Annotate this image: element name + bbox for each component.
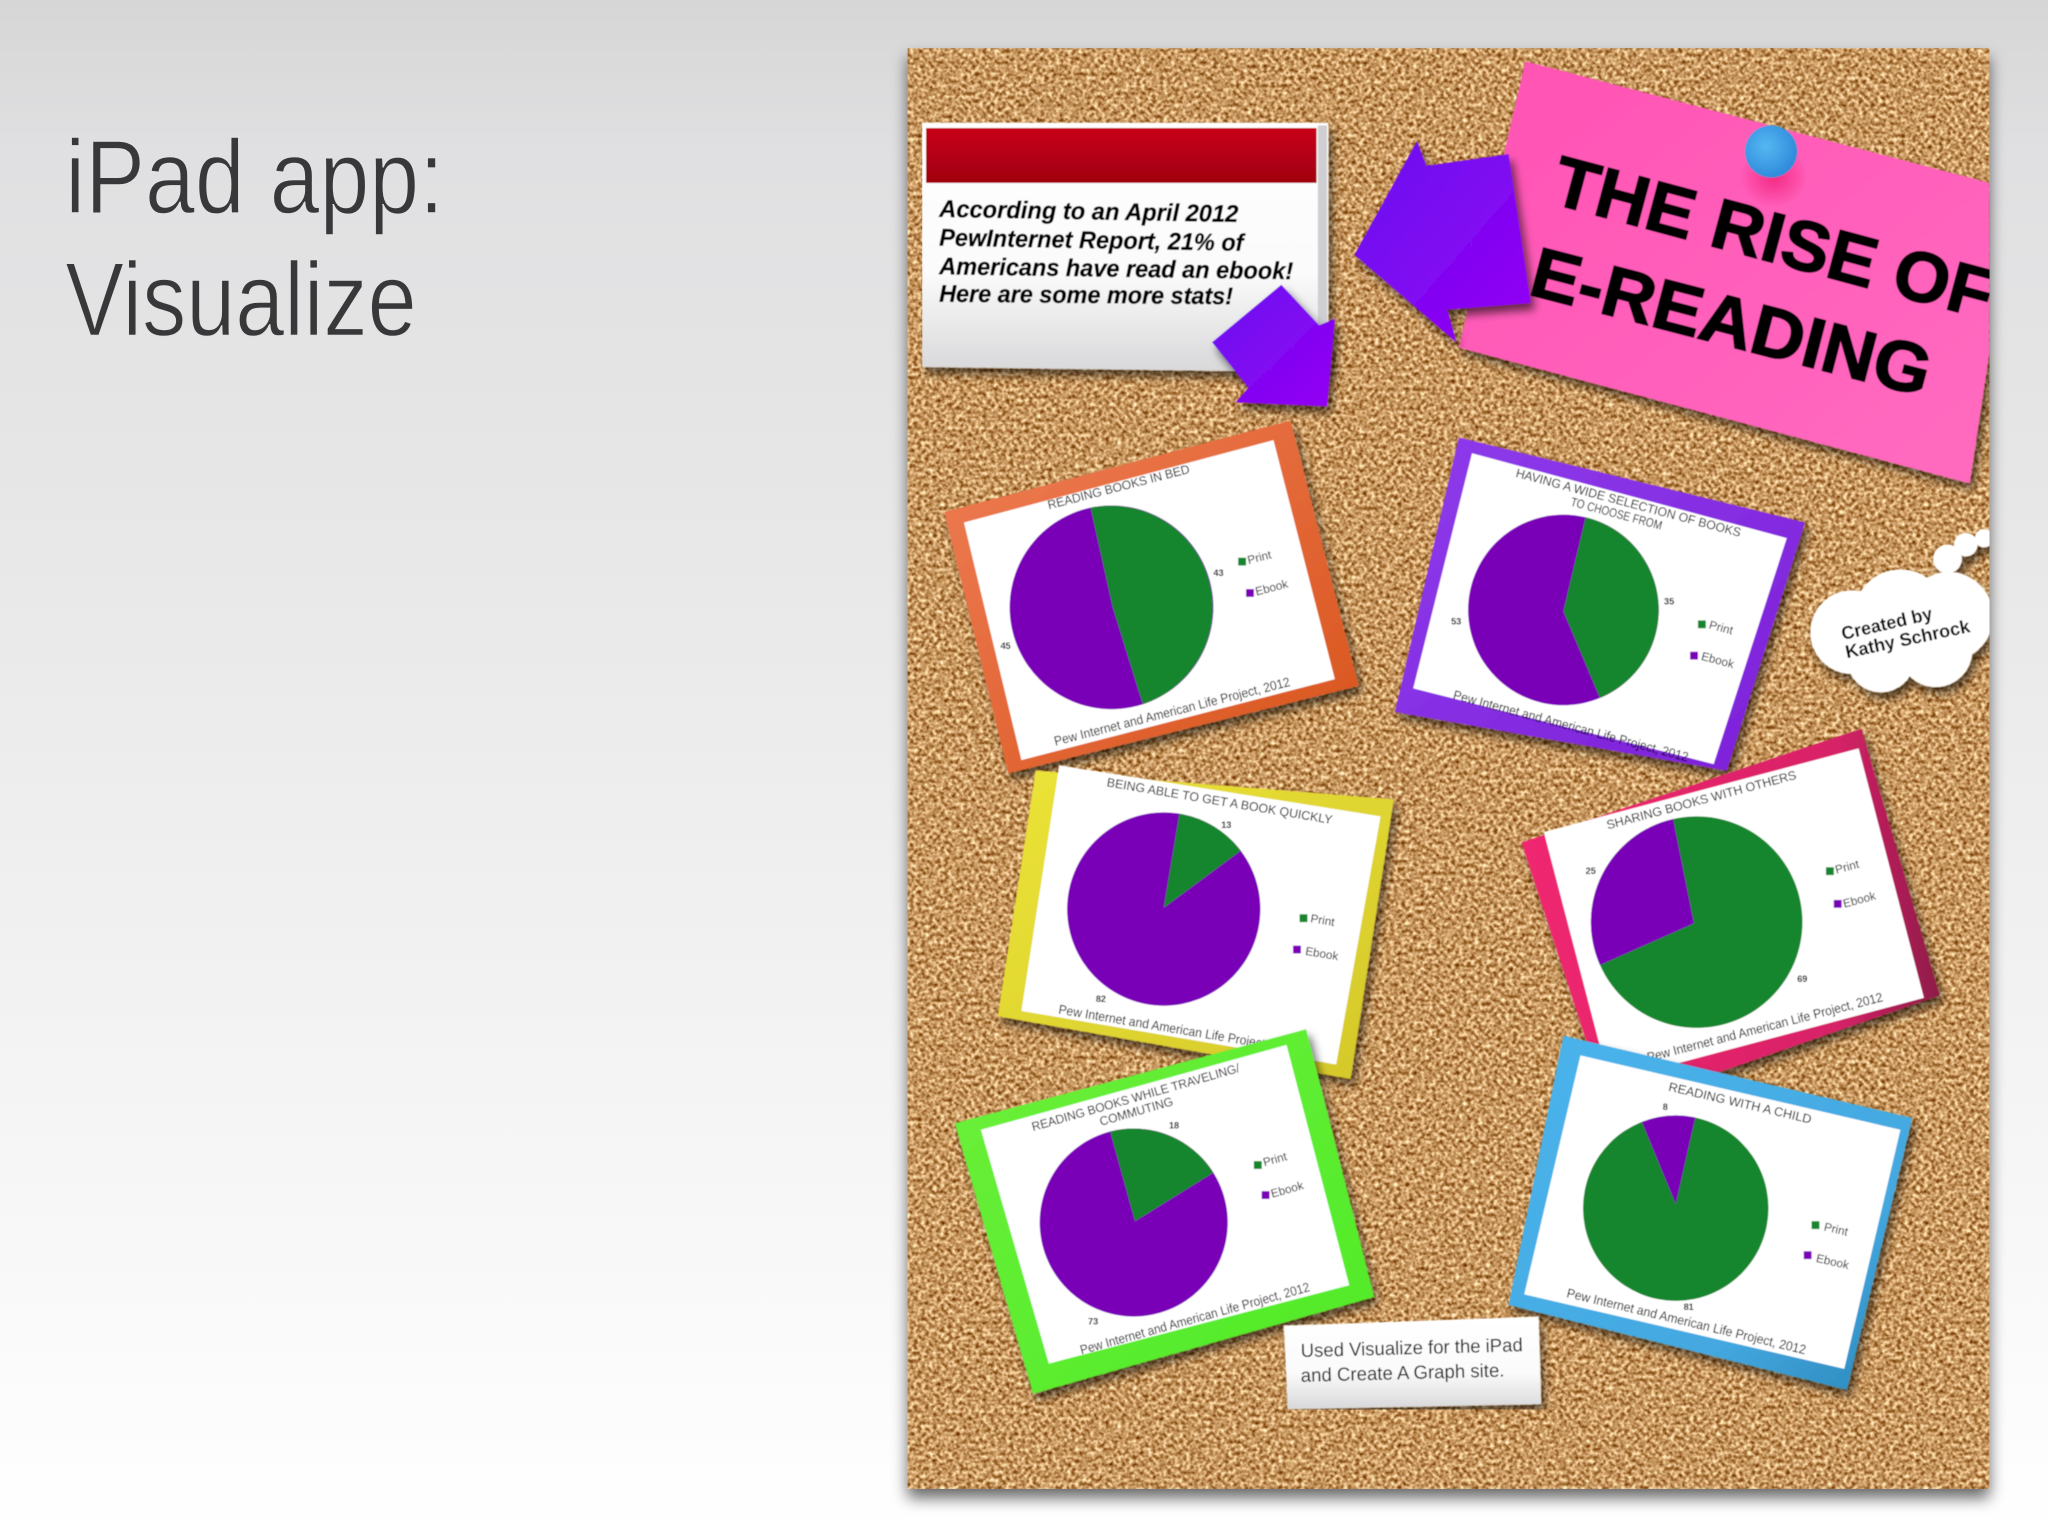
pie chart [1591,816,1802,1028]
legend: Print [1310,912,1336,929]
pie chart [1067,812,1260,1006]
legend: Print [1823,1221,1850,1239]
chart title: SHARING BOOKS WITH OTHERS [1605,768,1798,832]
panel: chart wide selection [1395,438,1805,771]
corkboard background [908,48,1989,1489]
data labels: 69 [1797,974,1807,984]
legend: Ebook [1700,650,1735,671]
legend: Ebook [1254,578,1290,598]
data labels: 8 [1663,1102,1668,1112]
data labels: 13 [1221,820,1231,830]
data labels [1586,866,1807,984]
chart title: BEING ABLE TO GET A BOOK QUICKLY [1106,775,1334,827]
chart source: Pew Internet and American Life Project, 2012 [1057,1002,1300,1057]
intro note text: Americans have read an ebook! [938,253,1293,285]
tools note text: Used Visualize for the iPad [1300,1335,1523,1362]
data labels [1000,568,1224,651]
data labels: 82 [1096,994,1106,1004]
cloud text: Created by [1839,602,1935,644]
data labels: 81 [1684,1302,1694,1312]
panel: chart get a book quickly [998,765,1394,1079]
chart source: Pew Internet and American Life Project, 2012 [1452,687,1690,765]
pie chart [1040,1128,1228,1317]
panel: chart traveling or commuting [955,1029,1374,1394]
data labels: 25 [1586,866,1596,876]
legend [1293,912,1339,963]
legend: Print [1262,1150,1289,1169]
data labels: 53 [1451,616,1461,626]
data labels: 73 [1088,1316,1098,1326]
legend: Print [1708,619,1735,638]
chart source: Pew Internet and American Life Project, 2012 [1052,674,1291,749]
chart title: COMMUTING [1098,1094,1175,1129]
panel: tools note [1284,1317,1541,1409]
title: E-READING [1523,232,1940,411]
intro note text: PewInternet Report, 21% of [939,225,1247,257]
legend [1254,1150,1305,1201]
data labels [1088,1120,1179,1326]
heading [65,119,444,359]
panel: title note [1459,61,1989,483]
panel: created by cloud [1810,529,1993,692]
pie chart [1583,1115,1768,1301]
chart title: READING BOOKS IN BED [1046,462,1191,512]
chart title: READING BOOKS WHILE TRAVELING/ [1030,1061,1242,1134]
legend [1826,858,1877,911]
title [1530,154,1990,394]
intro note text [938,196,1293,310]
legend: Print [1834,858,1861,877]
chart source: Pew Internet and American Life Project, 2012 [1078,1279,1311,1357]
heading: iPad app: [65,119,444,236]
pin shadow [1745,160,1803,204]
legend [1804,1221,1850,1272]
chart source: Pew Internet and American Life Project, 2012 [1645,989,1884,1065]
data labels: 35 [1664,597,1674,607]
panel: chart sharing books [1522,729,1940,1110]
legend: Print [1246,548,1274,567]
chart title: READING WITH A CHILD [1667,1080,1813,1126]
panel: intro note [922,123,1328,372]
panel: chart reading books in bed [944,421,1358,773]
tools note text: and Create A Graph site. [1300,1361,1505,1387]
arrow: down to charts [1212,285,1335,406]
legend: Ebook [1269,1179,1305,1201]
legend: Ebook [1304,945,1339,963]
arrow: title to intro note [1354,141,1531,342]
legend [1690,619,1735,671]
panel: chart reading with a child [1509,1036,1912,1390]
data labels: 18 [1169,1120,1179,1130]
chart title: HAVING A WIDE SELECTION OF BOOKS [1514,466,1743,540]
heading: Visualize [65,242,417,359]
cloud text: Kathy Schrock [1843,615,1972,662]
legend: Ebook [1815,1252,1850,1272]
chart source: Pew Internet and American Life Project, 2012 [1565,1285,1808,1357]
title: THE RISE OF [1545,141,2002,334]
legend [1238,548,1290,598]
corkboard contents [922,61,2002,1409]
pie chart [1010,505,1213,709]
pie chart [1468,515,1659,705]
legend: Ebook [1842,889,1877,911]
tools note text [1300,1335,1523,1387]
chart title: TO CHOOSE FROM [1569,495,1664,533]
data labels [1663,1102,1694,1312]
data labels: 43 [1213,568,1224,578]
data labels [1451,597,1674,626]
icon: blue pin [1745,125,1797,178]
intro note text: Here are some more stats! [939,281,1233,310]
data labels: 45 [1000,641,1011,651]
data labels [1096,820,1231,1004]
intro note text: According to an April 2012 [938,196,1239,228]
